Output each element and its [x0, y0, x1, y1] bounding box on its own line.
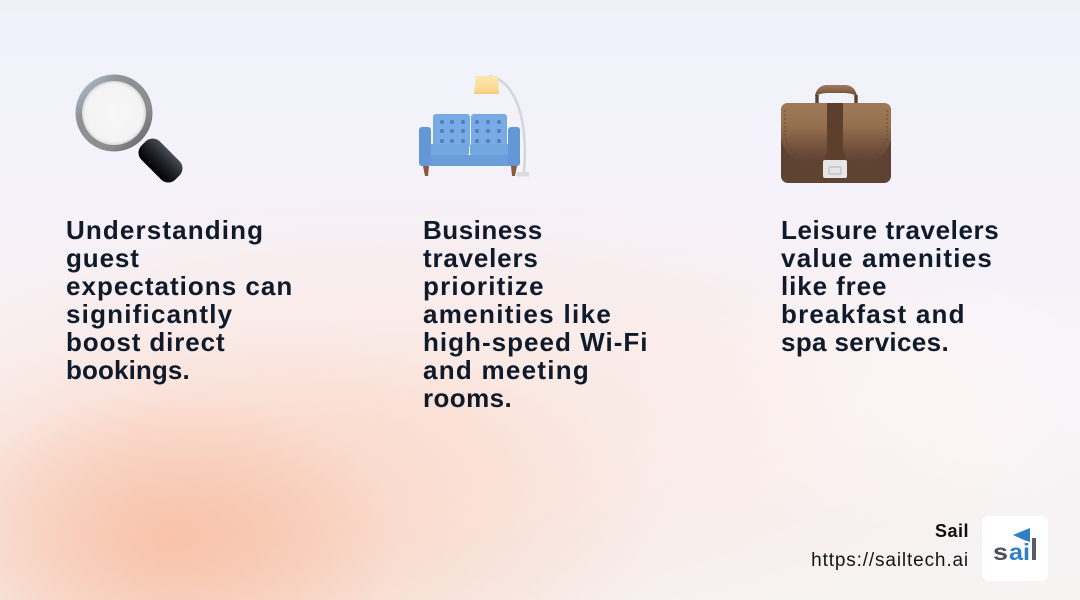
text: leisure travelers: Leisure travelers	[781, 215, 999, 245]
icon: briefcase	[781, 85, 891, 183]
text: guest expectations: significantly	[66, 299, 233, 329]
text: leisure travelers	[781, 215, 999, 357]
text: leisure travelers: value amenities	[781, 243, 993, 273]
text: guest expectations: bookings.	[66, 355, 190, 385]
text: guest expectations: boost direct	[66, 327, 226, 357]
text: business travelers: travelers	[423, 243, 539, 273]
text: guest expectations: guest	[66, 243, 140, 273]
brand name: Sail	[935, 521, 969, 541]
text: business travelers: prioritize	[423, 271, 545, 301]
text: business travelers: rooms.	[423, 383, 512, 413]
logo: sail: ai	[1009, 539, 1030, 565]
icon: magnifying glass	[76, 74, 182, 182]
text: leisure travelers: like free	[781, 271, 887, 301]
text: leisure travelers: breakfast and	[781, 299, 966, 329]
text: business travelers	[423, 215, 649, 413]
text: guest expectations	[66, 215, 293, 385]
icon: sofa with floor lamp	[419, 74, 529, 176]
text: business travelers: amenities like	[423, 299, 612, 329]
logo: sail	[982, 516, 1048, 581]
text: leisure travelers: spa services.	[781, 327, 949, 357]
text: business travelers: and meeting	[423, 355, 590, 385]
logo: sail: s	[993, 539, 1008, 565]
text: guest expectations: Understanding	[66, 215, 264, 245]
brand url: https://sailtech.ai	[811, 550, 969, 571]
text: business travelers: high-speed Wi-Fi	[423, 327, 649, 357]
text: guest expectations: expectations can	[66, 271, 293, 301]
text: business travelers: Business	[423, 215, 543, 245]
